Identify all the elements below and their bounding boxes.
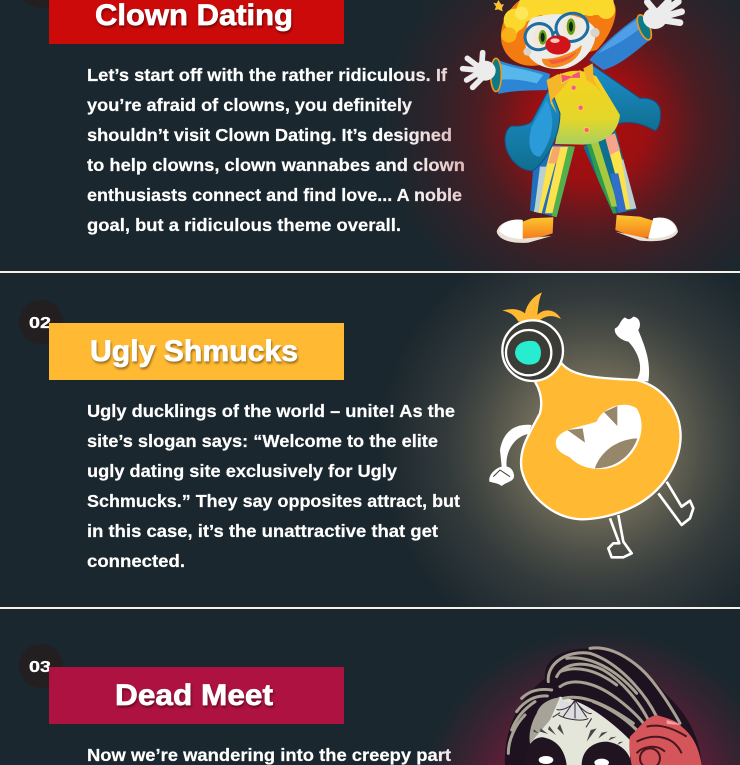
title banner: Ugly Shmucks: Ugly Shmucks [90,335,298,368]
number badge 01 [19,0,63,8]
left sleeve [497,59,550,94]
description text: Ugly ducklings of the world – unite! As the [87,401,455,421]
description text: to help clowns, clown wannabes and clown [87,155,465,175]
hair back [501,0,616,66]
spider web [559,700,590,720]
bow tie [561,71,581,83]
description text: Let’s start off with the rather ridiculous. If [87,65,447,85]
icon: clown illustration [463,0,682,243]
description text: shouldn’t visit Clown Dating. It’s designed [87,125,452,145]
panel: clown dating [19,0,740,271]
mouth [542,45,582,68]
number badge 02 [19,300,63,344]
legs [608,482,693,557]
coat left tail [505,87,560,171]
title banner: Ugly Shmucks [49,323,344,380]
face [526,14,596,69]
panel: dead meet [19,609,740,765]
crimson glow [415,609,740,765]
hair strands [508,648,680,753]
description text: Now we’re wandering into the creepy part [87,745,451,765]
body [521,363,681,519]
shoes [497,215,678,243]
icon: one-eyed monster [489,292,693,557]
description text: in this case, it’s the unattractive that get [87,521,438,541]
description text: enthusiasts connect and find love... A noble [87,185,462,205]
arms [615,317,649,382]
face [528,697,630,765]
description text [87,65,465,235]
feathers [502,292,561,322]
nose [545,35,571,55]
pants [530,144,575,218]
vest [550,71,620,145]
number badge 03 [19,644,63,688]
glove left [463,53,496,87]
hair mass [505,648,702,765]
buttons [571,85,589,133]
glasses [522,10,591,53]
brow dots [533,724,623,745]
title banner: Dead Meet: Dead Meet [115,679,273,712]
number badge 02: 02 [29,315,51,332]
eye [502,320,563,381]
glove right [643,1,682,29]
far sleeve: right arm [589,15,652,70]
description text [87,401,460,571]
number badge 03: 03 [29,659,51,676]
icon: sugar skull woman [505,648,702,765]
panel: ugly shmucks [19,273,740,607]
description text: ugly dating site exclusively for Ugly [87,461,397,481]
coat back right tail [590,63,661,131]
description text: goal, but a ridiculous theme overall. [87,215,401,235]
rose [629,715,702,765]
mouth [556,405,642,469]
lapels [547,74,571,113]
description text: Schmucks.” They say opposites attract, but [87,491,460,511]
title banner: Dead Meet [49,667,344,724]
red glow [385,0,740,271]
hair curls [503,0,615,42]
description text: connected. [87,551,185,571]
title banner: Clown Dating [49,0,344,44]
eye sockets [525,737,567,765]
star [493,0,504,11]
description text: you’re afraid of clowns, you definitely [87,95,412,115]
divider lines [0,271,740,273]
beige glow [380,273,740,607]
eyes [533,27,550,48]
description text: site’s slogan says: “Welcome to the elite [87,431,438,451]
